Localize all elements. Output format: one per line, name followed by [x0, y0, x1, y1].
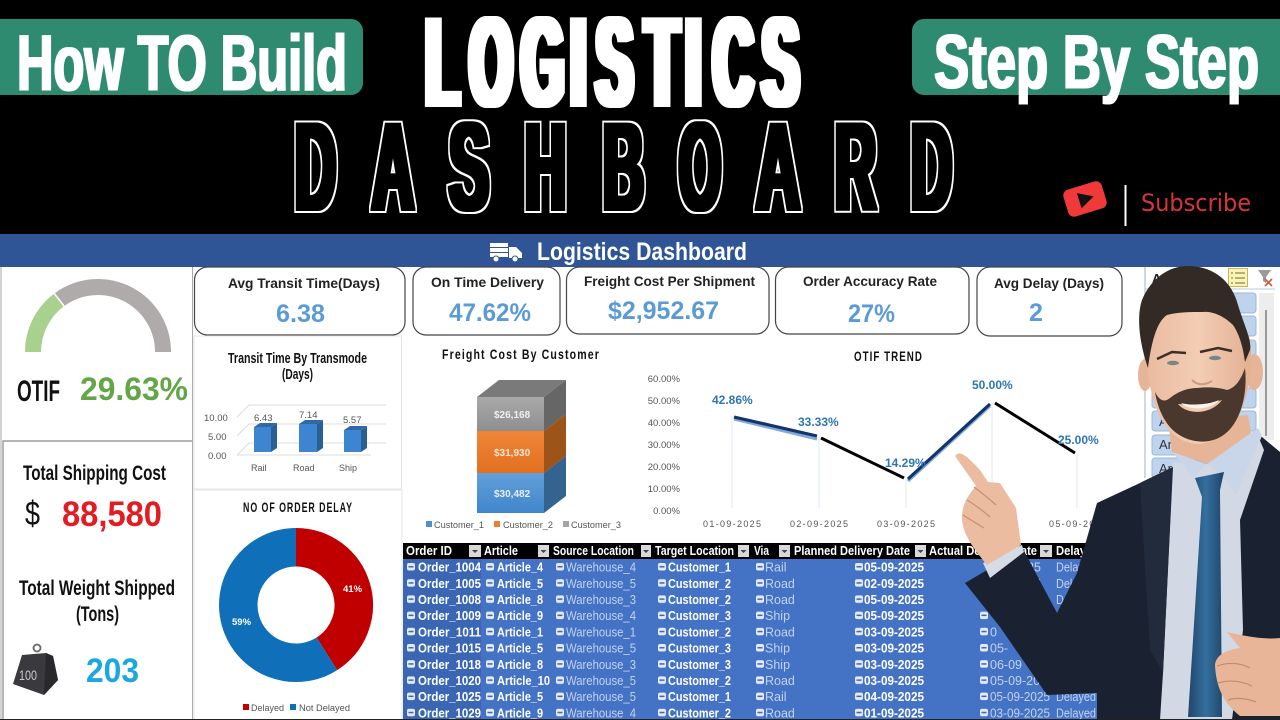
table row: Order_1020: Customer_2 — [668, 674, 731, 688]
panel: order delay donut chart: 59% — [232, 617, 252, 628]
y axis labels: 50.00% — [648, 396, 681, 407]
panel: article slicer: Ar — [1159, 461, 1173, 476]
table header: Planned Delivery Date — [794, 544, 910, 558]
table row: Order_1018 — [418, 658, 1022, 672]
table row: Order_1018: Order_1018 — [418, 658, 481, 672]
table row: Order_1018: 06-09 — [990, 658, 1022, 672]
title: DASHBOARD outlined — [295, 98, 952, 237]
KPI card: freight cost per shipment: $2,952.67 — [608, 297, 719, 325]
table row: Order_1025: Order_1025 — [418, 690, 481, 704]
segment: Customer_2 — [477, 431, 544, 473]
table row: Order_1011: Order_1011 — [418, 626, 481, 640]
table row: Order_1008: 05-09-2025 — [864, 593, 924, 607]
ears — [1138, 359, 1152, 391]
tie — [1188, 472, 1224, 717]
badge: How TO Build — [0, 18, 363, 107]
table row: Order_1020: Order_1020 — [418, 674, 481, 688]
smile — [1181, 400, 1219, 408]
table row: Order_1009: Warehouse_4 — [566, 609, 636, 623]
table row: Order_1004: 05-09-2025 — [864, 560, 924, 574]
icon: delivery truck — [490, 243, 522, 262]
panel: transit time bar chart: 0.00 — [208, 451, 226, 462]
table row: Order_1005: 02-09-2025 — [864, 577, 924, 591]
panel: article slicer: Ar — [1159, 414, 1173, 429]
KPI card: on time delivery — [413, 267, 560, 335]
table row: Order_1005 — [418, 577, 1096, 591]
table row: Order_1020: Warehouse_5 — [566, 674, 636, 688]
legend — [426, 520, 621, 530]
legend: Not Delayed — [299, 703, 350, 713]
panel: transit time bar chart: Transit Time By Transmode — [228, 350, 367, 367]
table row: Order_1025: Warehouse_5 — [566, 690, 636, 704]
KPI card: average transit time: 6.38 — [276, 300, 325, 328]
table row: Order_1008: Customer_2 — [668, 593, 731, 607]
panel: OTIF trend line chart: 50.00% — [972, 378, 1013, 392]
collar — [1172, 428, 1262, 495]
panel: transit time bar chart: (Days) — [282, 366, 313, 383]
text: D — [911, 98, 952, 237]
panel: article slicer — [1145, 267, 1275, 478]
icon: multi-select — [1228, 268, 1248, 286]
legend: Customer_1 — [434, 520, 484, 530]
table row: Order_1005: Warehouse_5 — [566, 577, 636, 591]
eyes — [1167, 356, 1221, 365]
table row: Order_1020: 03-09-2025 — [864, 674, 924, 688]
title: DASHBOARD outlined: O — [679, 98, 721, 237]
KPI card: average transit time — [194, 267, 405, 335]
slicer scrollbar — [1259, 293, 1274, 440]
table header: Delay — [1056, 544, 1086, 558]
table row: Order_1004: Delayed — [1056, 560, 1096, 574]
table row: Order_1015: Ship — [765, 642, 790, 656]
y axis labels: 60.00% — [648, 374, 681, 385]
title: DASHBOARD outlined: A — [756, 98, 800, 237]
y axis labels: 30.00% — [648, 440, 681, 451]
table row: Order_1005: Order_1005 — [418, 577, 481, 591]
panel: shipping cost and weight totals: Total Shipping Cost — [23, 462, 166, 485]
table row: Order_1008: Article_8 — [497, 593, 543, 607]
icon: 100 weight — [13, 644, 58, 695]
table row: Order_1005: 25 — [1027, 577, 1041, 591]
table row: Order_1011: Road — [765, 626, 795, 640]
icon: 100 weight: 100 — [19, 667, 37, 683]
legend: Customer_3 — [571, 520, 621, 530]
panel: article slicer: Article — [1152, 271, 1192, 286]
title: DASHBOARD outlined: S — [449, 98, 489, 237]
panel: transit time bar chart: Rail — [251, 463, 267, 473]
table row: Order_1004 — [418, 560, 1096, 574]
x axis labels: 01-09-2025 — [703, 519, 761, 529]
legend: Delayed — [251, 703, 284, 713]
x axis labels: 05-09-2025 — [1049, 519, 1107, 529]
table row: Order_1015: 05- — [990, 642, 1008, 656]
table header — [403, 543, 1140, 559]
panel: transit time bar chart: Ship — [339, 463, 357, 473]
pointing hand — [955, 454, 1021, 565]
panel: OTIF trend line chart: OTIF TREND — [854, 348, 923, 364]
panel: shipping cost and weight totals: 88,580 — [62, 495, 162, 534]
segment: Customer_1: $30,482 — [494, 489, 531, 500]
panel: OTIF trend line chart: 42.86% — [712, 393, 753, 407]
table row: Order_1011: Article_1 — [497, 626, 543, 640]
table row: Order_1025: Delayed — [1056, 690, 1096, 704]
table row: Order_1008: Order_1008 — [418, 593, 481, 607]
table row: Order_1018: Article_8 — [497, 658, 543, 672]
table row: Order_1008: Delayed — [1056, 593, 1096, 607]
KPI card: freight cost per shipment — [566, 267, 769, 334]
x axis labels: 02-09-2025 — [790, 519, 848, 529]
table row: Order_1005: Article_5 — [497, 577, 543, 591]
table row: Order_1025: 04-09-2025 — [864, 690, 924, 704]
table row: Order_1011: Customer_2 — [668, 626, 731, 640]
table row: Order_1008: Warehouse_3 — [566, 593, 636, 607]
y axis labels: 40.00% — [648, 418, 681, 429]
panel: order delay donut chart: 41% — [343, 584, 363, 595]
KPI card: order accuracy rate: 27% — [848, 300, 895, 328]
table row: Order_1015 — [418, 642, 1008, 656]
dashboard header bar — [0, 234, 1280, 267]
panel: OTIF gauge: 29.63% — [80, 371, 188, 407]
table row: Order_1025: Rail — [765, 690, 787, 704]
table row: Order_1025: 05-09-2025 — [990, 690, 1050, 704]
panel: shipping cost and weight totals: $ — [25, 495, 40, 533]
legend — [243, 703, 350, 713]
suit jacket — [965, 437, 1280, 720]
panel: transit time bar chart — [194, 336, 402, 489]
dashboard canvas — [0, 266, 1280, 720]
table header: Target Location — [655, 544, 734, 558]
subscribe call to action: Subscribe — [1141, 189, 1251, 217]
table row: Order_1004: Warehouse_4 — [566, 560, 636, 574]
eyebrows — [1157, 348, 1232, 359]
table row: Order_1015: Order_1015 — [418, 642, 481, 656]
icon: clear filter — [1258, 270, 1272, 286]
panel: shipping cost and weight totals: 203 — [86, 652, 139, 690]
table header: Via — [754, 544, 770, 558]
y axis labels — [648, 374, 681, 517]
segment: Customer_3: $26,168 — [494, 410, 531, 421]
table row: Order_1025 — [418, 690, 1096, 704]
KPI card: order accuracy rate: Order Accuracy Rate — [803, 273, 937, 289]
KPI card: average delay: Avg Delay (Days) — [994, 275, 1104, 291]
gauge arc — [33, 287, 163, 352]
table row: Order_1020: Article_10 — [497, 674, 550, 688]
y axis labels: 20.00% — [648, 462, 681, 473]
table row: Order_1009: Ship — [765, 609, 790, 623]
table row: Order_1004: 25 — [1027, 560, 1041, 574]
y axis labels: 0.00% — [653, 506, 681, 517]
panel: freight cost stacked 3D column — [426, 346, 621, 530]
panel: OTIF trend line chart — [648, 348, 1107, 529]
table row: Order_1020: Road — [765, 674, 795, 688]
table row: Order_1004: Customer_1 — [668, 560, 731, 574]
table row: Order_1020: Delayed — [1056, 674, 1096, 688]
title: DASHBOARD outlined: R — [835, 98, 876, 237]
KPI card: average delay: 2 — [1029, 299, 1043, 327]
table row: Order_1011: 0 — [990, 626, 997, 640]
slicer buttons — [1152, 293, 1256, 478]
panel: order data table — [403, 543, 1140, 720]
panel: OTIF trend line chart: 25.00% — [1058, 433, 1099, 447]
panel: shipping cost and weight totals: Total Weight Shipped — [19, 577, 175, 600]
y axis labels: 10.00% — [648, 484, 681, 495]
table row: Order_1015: Warehouse_5 — [566, 642, 636, 656]
title: DASHBOARD outlined: B — [603, 98, 644, 237]
panel: OTIF gauge — [3, 267, 192, 441]
beard — [1155, 368, 1246, 442]
bar: Road: 7.14 — [299, 410, 318, 421]
table row: Order_1004: Rail — [765, 560, 787, 574]
KPI card: order accuracy rate — [776, 267, 969, 334]
panel: order delay donut chart — [194, 490, 402, 720]
table row: Order_1005: Delayed — [1056, 577, 1096, 591]
panel: freight cost stacked 3D column: Freight Cost By Customer — [442, 346, 600, 362]
bar: Rail — [254, 413, 277, 452]
donut — [238, 547, 354, 663]
bar: Road — [299, 410, 323, 452]
table row: Order_1018: Ship — [765, 658, 790, 672]
panel: OTIF trend line chart: 33.33% — [798, 415, 839, 429]
shirt — [1160, 436, 1264, 720]
table row: Order_1015: Article_5 — [497, 642, 543, 656]
segment: Customer_2: $31,930 — [494, 448, 531, 459]
table header: Article — [484, 544, 518, 558]
face — [1146, 304, 1251, 444]
table row: Order_1004: Order_1004 — [418, 560, 481, 574]
table row: Order_1009: 05-09-2025 — [864, 609, 924, 623]
table row: Order_1009 — [418, 609, 924, 623]
KPI card: average delay — [977, 267, 1122, 336]
table row: Order_1009: Order_1009 — [418, 609, 481, 623]
panel: OTIF gauge: OTIF — [17, 375, 60, 408]
panel: shipping cost and weight totals: (Tons) — [76, 603, 119, 626]
table row: Order_1015: 03-09-2025 — [864, 642, 924, 656]
panel: shipping cost and weight totals — [1, 267, 192, 720]
lower hand — [1215, 632, 1280, 716]
table row: Order_1009: Article_9 — [497, 609, 543, 623]
bar: Ship: 5.57 — [343, 415, 362, 426]
table header: Actual Delivery Date — [929, 544, 1037, 558]
table row: Order_1025: Article_5 — [497, 690, 543, 704]
panel: article slicer: Ar — [1159, 437, 1173, 452]
bar: Ship — [343, 415, 367, 452]
hair — [1139, 266, 1250, 368]
panel: OTIF trend line chart: 14.29% — [885, 456, 926, 470]
badge: How TO Build: How TO Build — [17, 18, 347, 107]
panel: transit time bar chart: 10.00 — [204, 413, 228, 424]
table row: Order_1015: Customer_3 — [668, 642, 731, 656]
table header: Order ID — [406, 544, 452, 558]
icon: YouTube play button — [1062, 180, 1108, 218]
table row: Order_1018: Warehouse_3 — [566, 658, 636, 672]
title: DASHBOARD outlined: A — [372, 98, 414, 237]
x axis labels — [703, 519, 1107, 529]
trend line — [734, 403, 1075, 481]
segment: Customer_1 — [477, 473, 544, 513]
subscribe call to action — [1062, 180, 1251, 226]
table row: Order_1005: Customer_2 — [668, 577, 731, 591]
table row: Order_1020 — [418, 674, 1096, 688]
table row: Order_1029 — [418, 706, 1096, 720]
lapel shading — [1140, 467, 1173, 673]
bar: Rail: 6.43 — [254, 413, 272, 424]
legend: Customer_2 — [503, 520, 553, 530]
table row: Order_1018: Customer_3 — [668, 658, 731, 672]
table row: Order_1008 — [418, 593, 1096, 607]
panel: transit time bar chart: Road — [293, 463, 315, 473]
panel: order delay donut chart: NO OF ORDER DELAY — [243, 499, 353, 515]
filter buttons — [469, 545, 1052, 557]
shirt cuff — [983, 545, 1024, 578]
table header: Source Location — [553, 544, 634, 558]
table row: Order_1005: Road — [765, 577, 795, 591]
panel: transit time bar chart: 5.00 — [208, 432, 226, 443]
KPI card: on time delivery: 47.62% — [449, 299, 531, 327]
row icons — [407, 563, 988, 717]
x axis labels: 03-09-2025 — [877, 519, 935, 529]
dashboard header bar: Logistics Dashboard — [537, 238, 747, 266]
black title banner — [0, 0, 1280, 234]
title: DASHBOARD outlined: D — [295, 98, 336, 237]
title: DASHBOARD outlined: H — [525, 98, 566, 237]
table row: Order_1020: 05-09-20 — [990, 674, 1040, 688]
table row: Order_1011: 03-09-2025 — [864, 626, 924, 640]
KPI card: average transit time: Avg Transit Time(Days) — [228, 275, 380, 291]
bottom edge line — [0, 719, 1280, 720]
table row: Order_1011 — [418, 626, 997, 640]
KPI card: freight cost per shipment: Freight Cost Per Shipment — [584, 273, 755, 289]
table row: Order_1011: Warehouse_1 — [566, 626, 636, 640]
segment: Customer_3 — [477, 397, 544, 431]
table row: Order_1009: Customer_3 — [668, 609, 731, 623]
table row: Order_1008: Road — [765, 593, 795, 607]
KPI card: on time delivery: On Time Delivery — [431, 274, 544, 290]
table row: Order_1004: Article_4 — [497, 560, 543, 574]
nose — [1192, 380, 1212, 384]
table row: Order_1025: Customer_1 — [668, 690, 731, 704]
table row: Order_1018: 03-09-2025 — [864, 658, 924, 672]
person in suit pointing at the dashboard — [955, 266, 1280, 720]
neck — [1168, 415, 1252, 464]
